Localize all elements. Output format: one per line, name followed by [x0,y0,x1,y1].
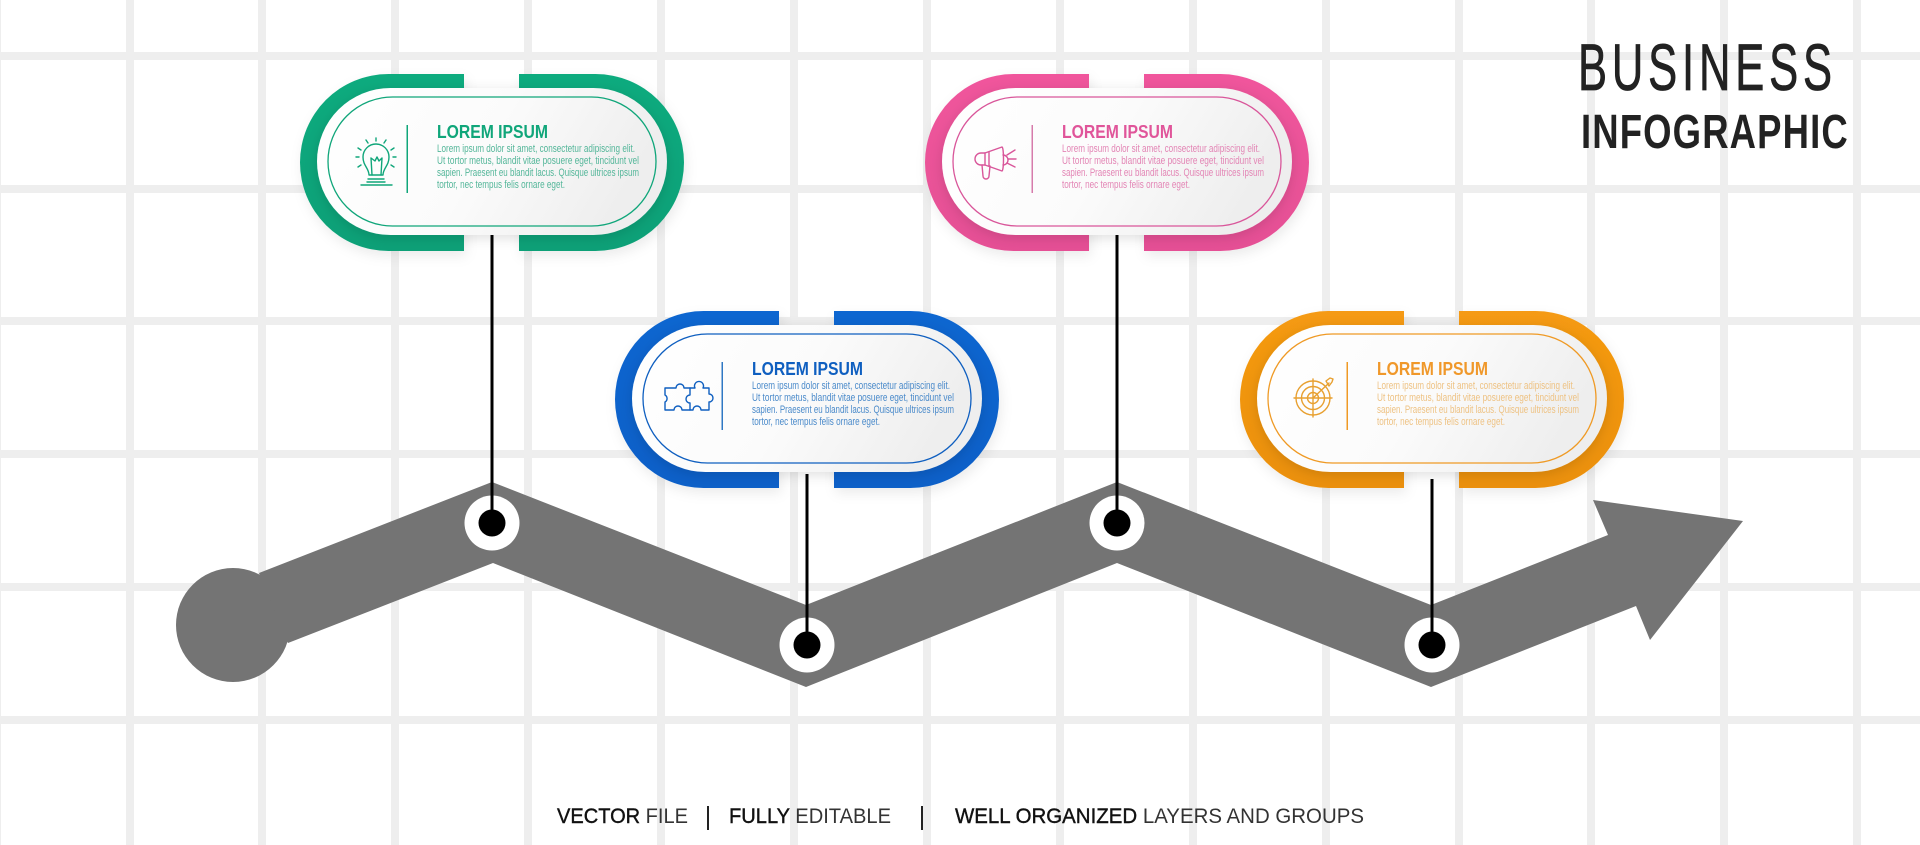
footer separator [921,806,923,830]
heading: LOREM IPSUM [1062,121,1173,142]
zigzag arrow path [176,482,1743,687]
connector 2 [806,474,808,645]
divider [722,362,723,430]
icon: lightbulb [356,138,396,185]
panel: blue puzzle [615,311,999,488]
title: BUSINESS [1578,30,1832,104]
divider [406,125,408,193]
footer separator [707,806,709,830]
panel: green lightbulb [300,74,684,251]
panel: orange target [1240,311,1624,488]
body text [437,143,639,191]
body text: sapien. Praesent eu blandit lacus. Quisque ultrices ipsum [437,167,639,179]
divider [1346,362,1348,430]
footer: vector file: VECTOR FILE [557,804,688,828]
heading: LOREM IPSUM [437,121,548,142]
footer: layers and groups: WELL ORGANIZED LAYERS AND GROUPS [955,804,1364,828]
marker 4 [1404,618,1460,672]
body text [752,380,954,428]
green outline [328,97,656,226]
body text: Ut tortor metus, blandit vitae posuere eget, tincidunt vel [437,155,639,167]
body text [1062,143,1264,191]
title [1578,30,1848,159]
body text: Lorem ipsum dolor sit amet, consectetur adipiscing elit. [437,143,635,155]
body text: Lorem ipsum dolor sit amet, consectetur adipiscing elit. [1062,143,1260,155]
body text: tortor, nec tempus felis ornare eget. [437,179,565,191]
icon: megaphone [975,147,1016,179]
body text: tortor, nec tempus felis ornare eget. [1377,416,1505,428]
connector 1 [490,235,494,523]
heading: LOREM IPSUM [752,358,863,379]
body text: Ut tortor metus, blandit vitae posuere eget, tincidunt vel [752,392,954,404]
pink outline [953,97,1281,226]
body text [1377,380,1579,428]
marker 1 [464,496,520,550]
white inner capsule [1257,325,1607,472]
green outer band [300,74,684,251]
orange outer band [1240,311,1624,488]
body text: Lorem ipsum dolor sit amet, consectetur adipiscing elit. [752,380,950,392]
connector 3 [1116,235,1118,523]
pink outer band [925,74,1309,251]
heading: LOREM IPSUM [1377,358,1488,379]
body text: sapien. Praesent eu blandit lacus. Quisque ultrices ipsum [1062,167,1264,179]
marker 2 [780,618,834,672]
panel: pink megaphone [925,74,1309,251]
body text: Ut tortor metus, blandit vitae posuere eget, tincidunt vel [1377,392,1579,404]
footer: fully editable: FULLY EDITABLE [729,804,891,828]
body text: sapien. Praesent eu blandit lacus. Quisque ultrices ipsum [752,404,954,416]
body text: tortor, nec tempus felis ornare eget. [752,416,880,428]
connector 4 [1430,479,1434,645]
icon: puzzle [665,381,713,410]
icon: target [1294,378,1333,417]
white inner capsule [632,325,982,472]
divider [1032,125,1033,193]
blue outer band [615,311,999,488]
white inner capsule [942,88,1292,235]
orange outline [1268,334,1596,463]
body text: tortor, nec tempus felis ornare eget. [1062,179,1190,191]
blue outline [643,334,971,463]
white inner capsule [317,88,667,235]
title: INFOGRAPHIC [1581,105,1848,159]
body text: Lorem ipsum dolor sit amet, consectetur adipiscing elit. [1377,380,1575,392]
body text: Ut tortor metus, blandit vitae posuere eget, tincidunt vel [1062,155,1264,167]
body text: sapien. Praesent eu blandit lacus. Quisque ultrices ipsum [1377,404,1579,416]
marker 3 [1090,496,1144,550]
